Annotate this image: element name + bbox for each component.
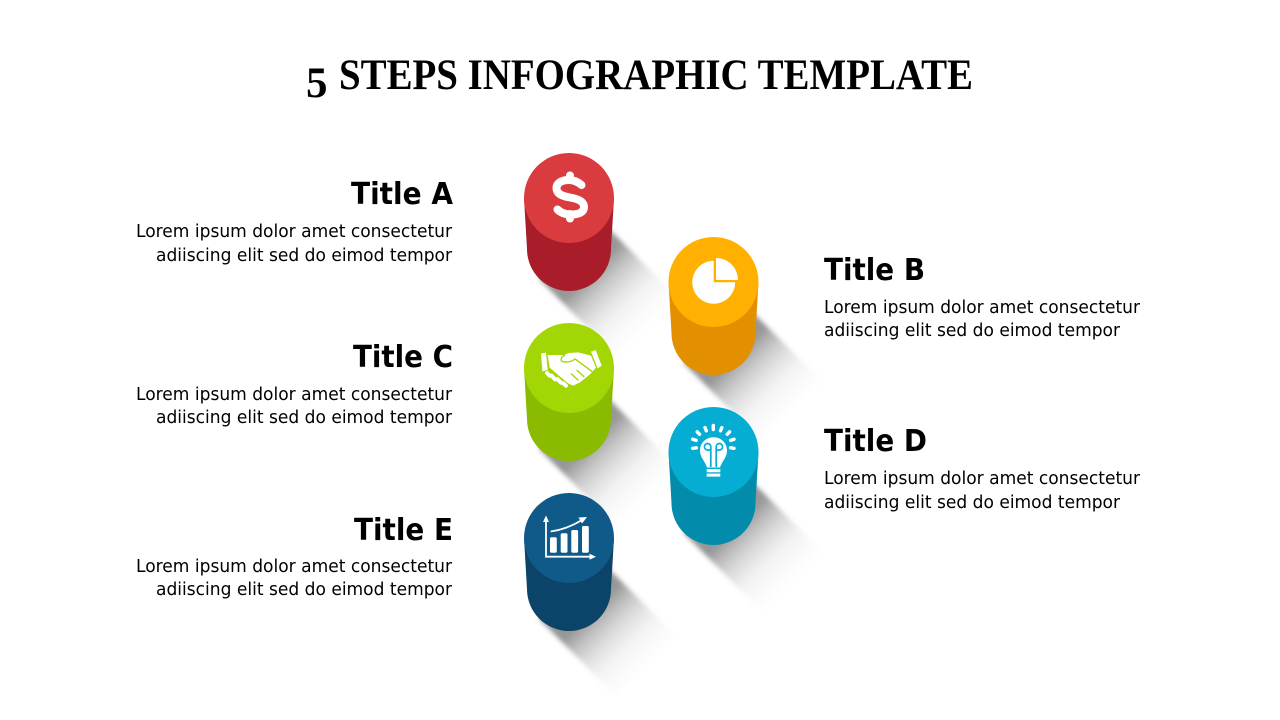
text block: Title A: Title A: [351, 177, 454, 212]
title: STEPS INFOGRAPHIC TEMPLATE: [339, 52, 973, 99]
text block: Title C: [136, 340, 453, 428]
text block: Title E: adiiscing elit sed do eimod tempor: [156, 579, 453, 600]
text block: Title B: Title B: [824, 253, 925, 288]
text block: Title A: adiiscing elit sed do eimod tempor: [156, 245, 453, 266]
text block: Title A: [136, 177, 454, 266]
step E: navy cylinder: [524, 493, 614, 631]
title: 5: [306, 60, 328, 107]
text block: Title D: Title D: [824, 424, 927, 459]
text block: Title B: adiiscing elit sed do eimod tempor: [824, 320, 1121, 341]
text block: Title C: Title C: [353, 340, 453, 375]
text block: Title B: Lorem ipsum dolor amet consectetur: [824, 297, 1141, 318]
text block: Title A: Lorem ipsum dolor amet consectetur: [136, 221, 453, 242]
text block: Title D: adiiscing elit sed do eimod tempor: [824, 492, 1121, 513]
step D: blue cylinder: [668, 407, 758, 545]
step B: orange cylinder: [668, 237, 758, 375]
text block: Title E: Lorem ipsum dolor amet consectetur: [136, 556, 453, 577]
icon: handshake: [541, 350, 602, 386]
text block: Title D: [824, 424, 1141, 513]
text block: Title D: Lorem ipsum dolor amet consectetur: [824, 468, 1141, 489]
text block: Title E: [136, 513, 453, 600]
text block: Title C: Lorem ipsum dolor amet consectetur: [136, 384, 453, 405]
icon: growth chart: [543, 516, 596, 560]
text block: Title C: adiiscing elit sed do eimod tempor: [156, 407, 453, 428]
icon: pie chart: [692, 258, 738, 304]
text block: Title B: [824, 253, 1141, 341]
step C: green cylinder: [524, 323, 614, 461]
shadows beneath cylinders: [539, 219, 822, 697]
text block: Title E: Title E: [354, 513, 453, 548]
icon: dollar: [556, 176, 584, 218]
icon: light bulb: [693, 426, 734, 477]
step A: red cylinder: [524, 153, 614, 291]
